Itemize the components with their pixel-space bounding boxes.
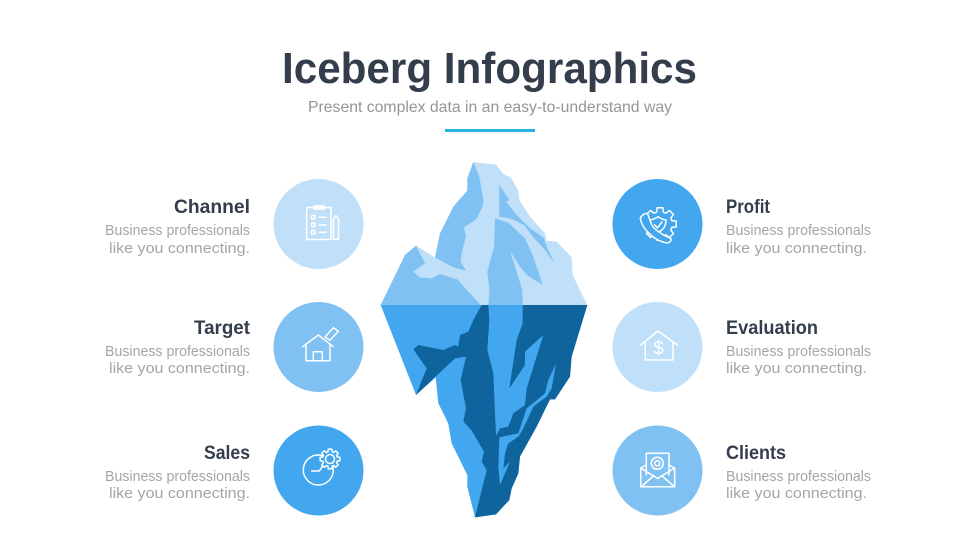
text: profit: Business professionals (726, 223, 871, 239)
iceberg: below water (381, 305, 587, 517)
text: target: like you connecting. (109, 361, 250, 377)
text: target: Business professionals (105, 344, 250, 360)
text: sales (105, 443, 250, 502)
text: channel: Business professionals (105, 223, 250, 239)
icon: open envelope with at sign (641, 453, 675, 487)
text: clients: like you connecting. (726, 486, 867, 502)
icon: house with pencil (303, 328, 338, 361)
circle: evaluation (612, 302, 702, 392)
circle: sales (274, 426, 364, 516)
text: evaluation: Business professionals (726, 344, 871, 360)
title: Iceberg Infographics (282, 44, 697, 93)
text: channel: like you connecting. (109, 241, 250, 257)
iceberg: above water (381, 162, 587, 305)
text: channel: Channel (174, 197, 250, 218)
text: clients (726, 443, 871, 502)
icon: clipboard and pencil (307, 206, 338, 240)
text: evaluation (726, 318, 871, 377)
icon: house with dollar: $ (653, 338, 664, 360)
text: sales: Sales (204, 443, 250, 464)
text: sales: Business professionals (105, 469, 250, 485)
circle: channel (274, 179, 364, 269)
text: profit: like you connecting. (726, 241, 867, 257)
text: clients: Business professionals (726, 469, 871, 485)
text: profit (726, 197, 871, 257)
icon: bomb with gear (303, 449, 340, 485)
text: profit: Profit (726, 197, 771, 218)
icon: house with dollar (641, 331, 677, 360)
icon: gear and shield check (640, 208, 676, 243)
text: evaluation: Evaluation (726, 318, 818, 339)
text: target: Target (194, 318, 251, 339)
title underline (445, 129, 535, 132)
subtitle: Present complex data in an easy-to-understand way (308, 99, 672, 116)
text: clients: Clients (726, 443, 786, 464)
text: sales: like you connecting. (109, 486, 250, 502)
text: evaluation: like you connecting. (726, 361, 867, 377)
text: target (105, 318, 251, 377)
text: channel (105, 197, 250, 257)
circle: clients (612, 426, 702, 516)
circle: profit (612, 179, 702, 269)
circle: target (274, 302, 364, 392)
